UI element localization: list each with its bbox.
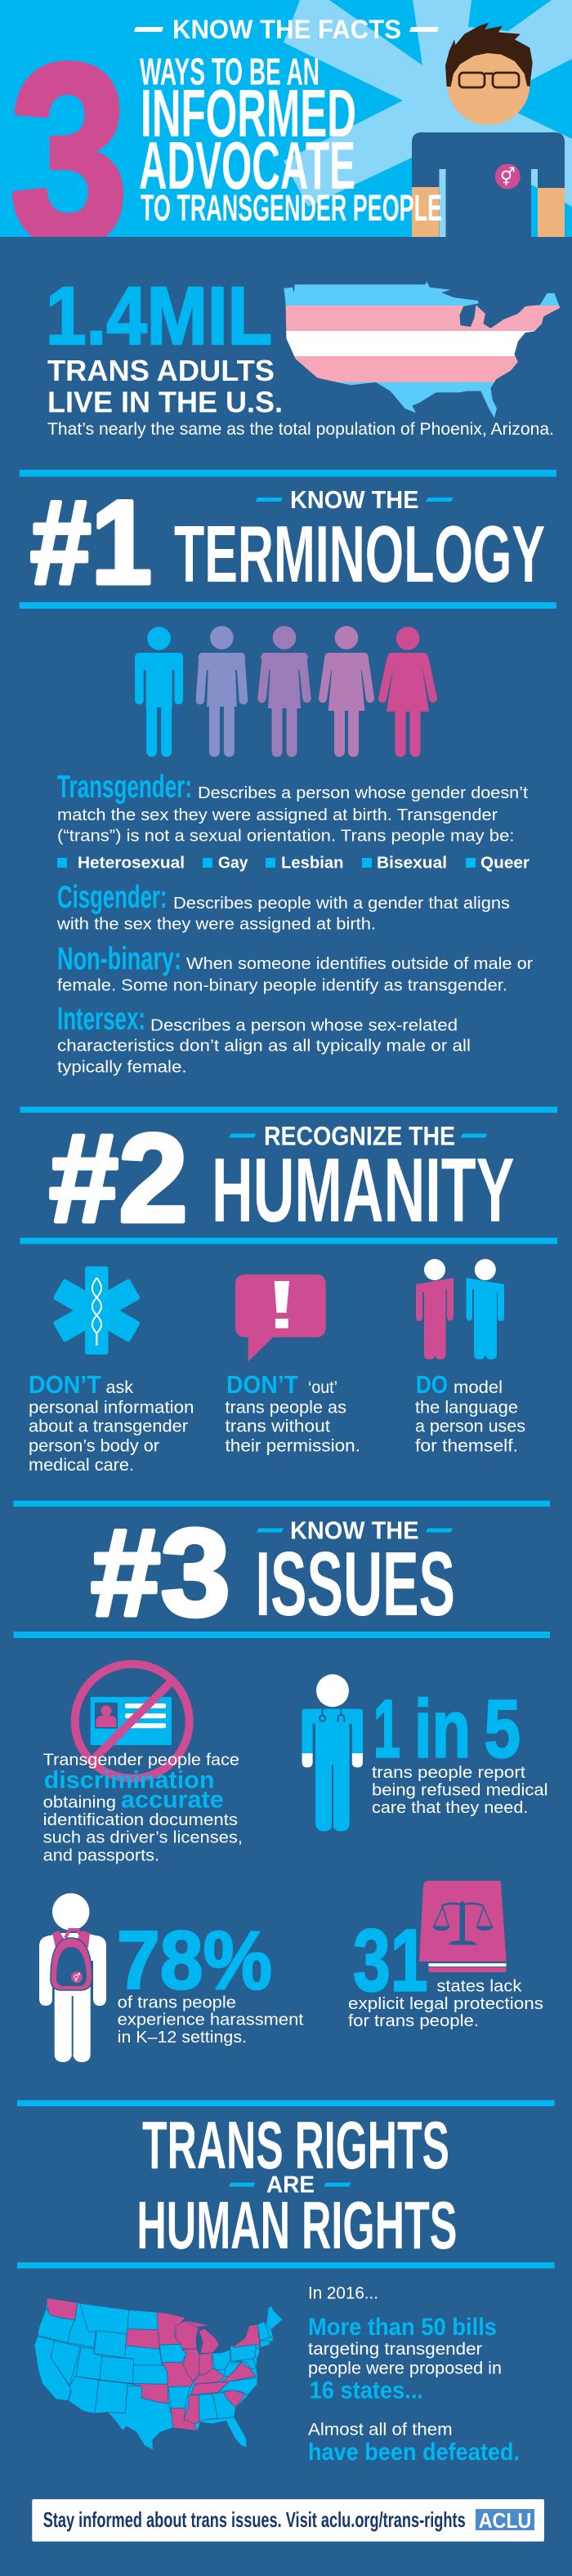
text: 2016 bills: Almost all of them — [308, 2421, 453, 2440]
definition: cisgender: Cisgender: — [57, 880, 167, 915]
stat: 1 in 5: 5 — [484, 1683, 521, 1775]
text: don't ask: personal information — [29, 1398, 194, 1417]
subheading: TRANS ADULTS — [47, 354, 275, 387]
text: do model: DO — [416, 1370, 448, 1399]
icon: doctor figure — [302, 1674, 363, 1832]
text: 2016 bills: More than 50 bills — [308, 2314, 497, 2341]
section heading — [17, 2100, 555, 2268]
definition: non-binary: When someone identifies outside of male or — [186, 954, 533, 973]
stat: 1 in 5: being refused medical — [372, 1780, 547, 1799]
column: don't out — [226, 1275, 360, 1456]
text: do model — [415, 1370, 525, 1456]
definition: intersex: characteristics don’t align as all typically male or all — [57, 1036, 471, 1056]
text: ID discrimination: accurate — [121, 1787, 224, 1814]
text: ID discrimination: identification documents — [43, 1810, 238, 1829]
figure 4 — [323, 626, 370, 752]
figure 1 — [135, 627, 183, 752]
kicker: know the facts — [134, 20, 439, 39]
text: 2016 bills: have been defeated. — [308, 2439, 520, 2466]
stat: 78 percent: 78% — [117, 1915, 272, 2007]
text: ID discrimination: such as driver’s licenses, — [43, 1828, 243, 1847]
text: ID discrimination — [43, 1751, 243, 1864]
icon: gender badge: ⚥ — [500, 167, 516, 187]
text: 2016 bills: In 2016... — [308, 2284, 378, 2303]
list: sexual orientations — [57, 855, 530, 873]
text: don't out: trans people as — [226, 1398, 346, 1417]
icon: star of life — [52, 1266, 141, 1355]
text: do model: model — [454, 1378, 503, 1397]
list: sexual orientations: Bisexual — [377, 855, 447, 873]
panel: section 3 issues — [13, 1501, 550, 2062]
text: ID discrimination: and passports. — [43, 1846, 159, 1864]
text: don't ask — [29, 1370, 194, 1475]
large numeral 3: 3 — [10, 12, 128, 297]
header background — [0, 0, 572, 237]
definition: non-binary: female. Some non-binary people identify as transgender. — [57, 976, 507, 995]
text: don't out: trans without — [226, 1417, 330, 1436]
text: 2016 bills: targeting transgender — [308, 2340, 482, 2359]
figure: pink person — [416, 1259, 454, 1359]
definition: intersex — [57, 1002, 471, 1077]
definition: transgender — [57, 770, 528, 845]
column: do model language — [415, 1259, 525, 1456]
icon: advocate character — [412, 23, 565, 237]
text: don't ask: about a transgender — [29, 1417, 188, 1436]
text: ID discrimination: obtaining — [43, 1793, 116, 1812]
icon: two people talking — [416, 1259, 504, 1359]
stat: 1 in 5: trans people report — [372, 1763, 525, 1782]
figure 5 — [382, 627, 433, 752]
title text: WAYS TO BE AN — [140, 51, 320, 93]
section heading: ARE — [266, 2172, 315, 2198]
text: ID discrimination: discrimination — [44, 1767, 215, 1794]
stat: 31 states — [348, 1910, 543, 2030]
text: don't ask: ask — [106, 1378, 134, 1397]
figure: blue person — [466, 1259, 504, 1359]
character body — [412, 132, 565, 237]
icon: law book with scales — [419, 1881, 507, 1972]
section heading: #1 — [30, 475, 152, 609]
panel: section 1 terminology — [20, 470, 556, 1077]
ACLU logo: ACLU — [479, 2508, 531, 2533]
text: don't out — [226, 1370, 360, 1456]
title text — [139, 51, 442, 229]
section heading: KNOW THE — [290, 1516, 418, 1544]
icon: prohibited ID card — [75, 1664, 190, 1779]
section heading: #2 — [49, 1108, 188, 1248]
section heading: RECOGNIZE THE — [264, 1122, 455, 1151]
subheading — [47, 354, 283, 418]
definition: cisgender: with the sex they were assigned at birth. — [56, 915, 376, 934]
stat: 31 states: for trans people. — [348, 2011, 479, 2030]
backpack: ⚥ — [73, 1973, 81, 1983]
sunburst rays — [284, 0, 572, 207]
stat: 1 in 5: 1 — [373, 1683, 400, 1775]
text: 2016 bills: people were proposed in — [308, 2359, 502, 2377]
section heading: #3 — [91, 1503, 230, 1642]
text: don't out: ‘out’ — [308, 1378, 337, 1397]
panel: header banner — [0, 0, 572, 237]
definition: transgender: Describes a person whose gender doesn’t — [198, 784, 528, 802]
panel: section 2 humanity — [20, 1106, 557, 1475]
definition: cisgender: Describes people with a gender that aligns — [173, 894, 510, 913]
stat: 78 percent: experience harassment — [118, 2010, 304, 2029]
definition: transgender: Transgender: — [57, 770, 192, 805]
subheading: LIVE IN THE U.S. — [47, 385, 283, 418]
text: ID discrimination: Transgender people face — [43, 1751, 239, 1770]
panel: 1.4 million statistic — [46, 270, 564, 439]
definition: cisgender — [56, 880, 510, 934]
text: do model: the language — [415, 1398, 518, 1417]
icon: speech bubble with exclamation — [235, 1275, 326, 1362]
stat: 1 in 5: care that they need. — [372, 1798, 528, 1817]
text: 2016 bills — [308, 2284, 520, 2466]
panel: trans rights are human rights — [17, 2100, 555, 2542]
caption: Phoenix comparison: That’s nearly the same as the total population of Phoenix, Arizona. — [47, 419, 554, 439]
title text: INFORMED — [141, 75, 356, 151]
scales of justice — [433, 1902, 493, 1944]
section heading — [13, 1501, 550, 1642]
text: don't out: DON’T — [226, 1370, 298, 1399]
figure 3 — [261, 626, 308, 752]
column: don't ask — [29, 1266, 194, 1475]
list: sexual orientations: Heterosexual — [78, 855, 185, 873]
list: sexual orientations: Gay — [218, 855, 248, 873]
stat: 78 percent: of trans people — [118, 1993, 236, 2011]
stat: 31 states: 31 — [353, 1910, 428, 2010]
backpack — [51, 1930, 92, 1990]
definition: non-binary — [57, 941, 533, 995]
definition: intersex: typically female. — [57, 1058, 187, 1077]
definition: intersex: Describes a person whose sex-related — [150, 1016, 458, 1034]
list: sexual orientations: Queer — [480, 855, 530, 873]
big number 1.4MIL: 1.4MIL — [46, 270, 272, 362]
icon: gender badge — [495, 163, 521, 190]
definition: transgender: (“trans”) is not a sexual orientation. Trans people may be: — [57, 826, 515, 845]
text: don't ask: medical care. — [29, 1456, 134, 1475]
stat: 31 states: explicit legal protections — [348, 1994, 543, 2013]
section heading: KNOW THE — [290, 485, 418, 514]
text: don't ask: person’s body or — [29, 1437, 159, 1456]
map: US in trans flag stripes — [278, 278, 564, 423]
list: sexual orientations: Lesbian — [281, 855, 343, 873]
text: do model: for themself. — [415, 1437, 518, 1456]
definition: intersex: Intersex: — [57, 1002, 145, 1037]
text: do model: a person uses — [415, 1417, 525, 1436]
stat: 1 in 5: in — [414, 1683, 471, 1775]
icon: five figures from male to female — [135, 626, 433, 752]
definition: non-binary: Non-binary: — [57, 941, 181, 977]
section heading — [20, 1106, 557, 1248]
character head — [445, 23, 533, 125]
stat: 31 states: states lack — [436, 1977, 522, 1995]
map: states with anti-trans bills — [34, 2298, 283, 2450]
icon: student with backpack — [39, 1893, 106, 2062]
stat: 1 in 5 — [372, 1683, 547, 1817]
footer call to action — [32, 2499, 544, 2542]
section heading — [20, 470, 556, 609]
title text: ADVOCATE — [139, 127, 355, 203]
stat: 78 percent — [117, 1915, 304, 2047]
text: don't out: their permission. — [226, 1437, 360, 1456]
figure 2 — [198, 626, 245, 752]
definition: transgender: match the sex they were assigned at birth. Transgender — [57, 806, 498, 824]
kicker: know the facts: KNOW THE FACTS — [172, 15, 401, 44]
text: 2016 bills: 16 states... — [310, 2377, 423, 2404]
text: don't ask: DON’T — [29, 1370, 101, 1399]
stat: 78 percent: in K–12 settings. — [118, 2028, 247, 2047]
